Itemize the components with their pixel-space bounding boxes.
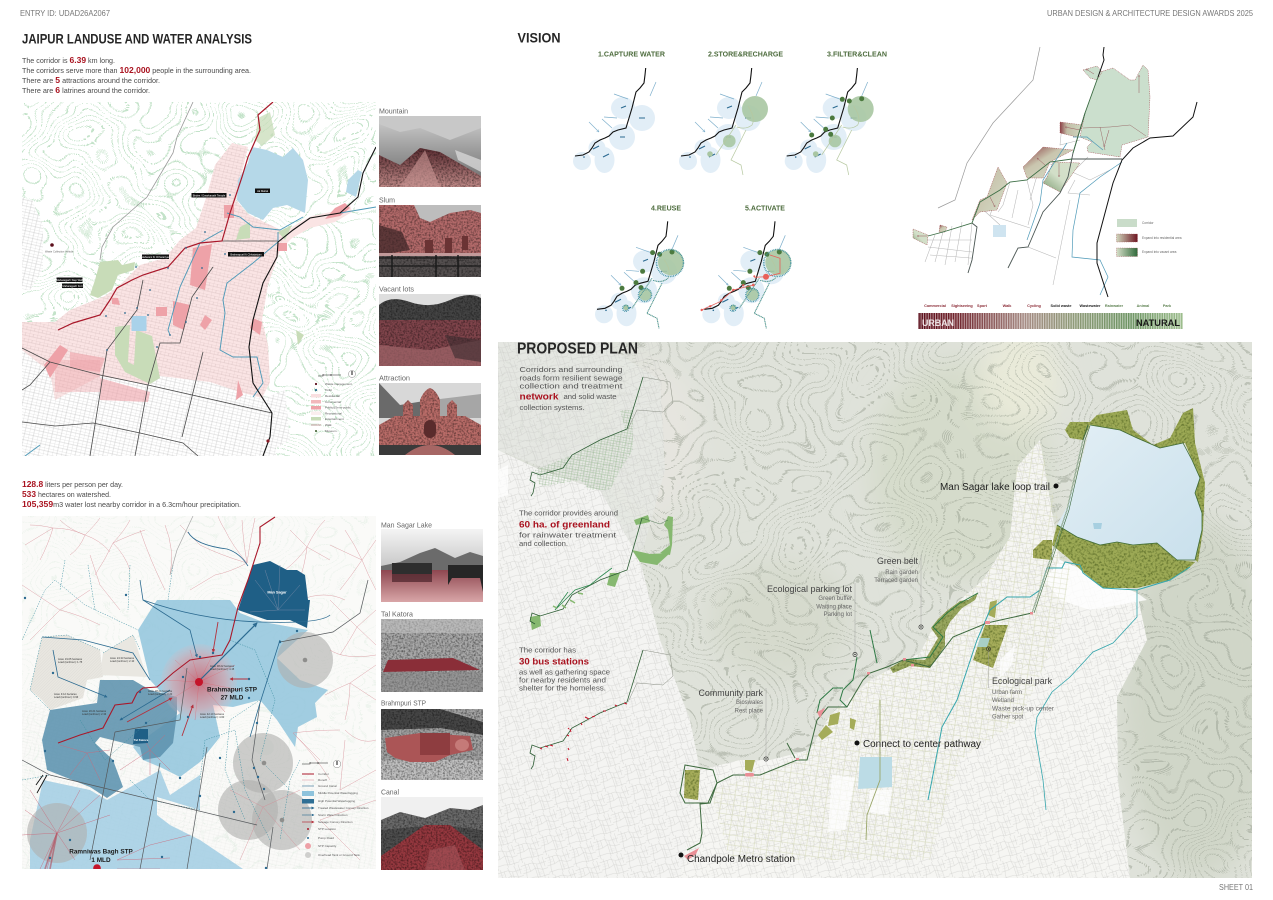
water legend: Overhead Tank or Ground Tank [318, 853, 360, 857]
text block: water figures: 105,359m3 water lost nearby corridor in a 6.3cm/hour precipitation. [22, 499, 241, 509]
text block: sewage network: Corridors and surrounding [520, 367, 623, 374]
olive planted areas [684, 540, 1052, 800]
area labels: Area: 28.24 hectares [148, 689, 173, 693]
text block: greenland: 60 ha. of greenland [519, 518, 610, 530]
photo: vacant lots [379, 284, 481, 366]
recreation green areas [90, 112, 304, 384]
heading: Proposed plan: PROPOSED PLAN [517, 340, 638, 358]
dashed storm boundaries [22, 560, 300, 840]
urban to natural spectrum bar [918, 313, 1183, 329]
water legend: STP Location [318, 827, 336, 831]
step heading 4: 4.REUSE [651, 204, 681, 212]
map tags: Birdee / Dwarkanath Temple [193, 193, 226, 197]
red corridor [58, 102, 273, 330]
landuse legend: Recreational [325, 412, 342, 416]
water legend: Pump Road [318, 836, 334, 840]
inset map: bus stations [530, 650, 673, 769]
text block: greenland [519, 510, 618, 548]
photo: attraction [379, 374, 481, 455]
landuse legend: Public&Semi-public [325, 406, 351, 410]
waterlogging zone: middle watershed [133, 600, 328, 777]
landuse legend: Waste management [325, 382, 352, 386]
callout: community park: Bioswales [736, 700, 763, 706]
inset map: greenland [530, 515, 673, 630]
entry id header: ENTRY ID: UDAD26A2067 [20, 9, 111, 18]
thin grey highway [100, 102, 193, 260]
callout: ecological park [986, 647, 1054, 720]
text block: bus stations: 30 bus stations [519, 656, 589, 666]
callout: green belt [874, 555, 923, 629]
legend: corridor expansion: Expand into residential area [1142, 236, 1182, 240]
callout: Man Sagar lake loop trail: Man Sagar lake loop trail [940, 482, 1050, 493]
photo: canal: Canal [381, 788, 399, 796]
area labels: Load (ton/hour): 1.75 [58, 660, 83, 664]
STP capacity halo [161, 644, 237, 720]
text block: sewage network: roads form resilient sewage [520, 375, 623, 382]
label: Ramniwas Bagh STP: 1 MLD [91, 857, 111, 864]
area labels: Load (ton/hour): 3.20 [148, 692, 173, 696]
text block: corridor facts: The corridor is 6.39 km long. [22, 55, 115, 65]
photo: mountain [379, 106, 481, 187]
red corridor [58, 517, 275, 743]
mountain white highlights [1045, 560, 1147, 610]
photo: attraction: Attraction [379, 374, 410, 383]
city street texture [498, 342, 700, 878]
text block: water figures: 128.8 liters per person per day. [22, 479, 123, 489]
diagram: activate [700, 221, 791, 328]
waterlogging zone: lower watershed [30, 770, 243, 869]
text block: greenland: for rainwater treatment [519, 532, 616, 540]
area labels: Load (ton/hour): 0.96 [54, 695, 79, 699]
pond near center pathway [858, 757, 892, 789]
photo: Tal Katora [381, 610, 483, 692]
dense runoff fans [22, 650, 240, 869]
toilet and museum markers [50, 194, 270, 443]
landuse legend: Walk [325, 423, 332, 427]
text block: greenland: The corridor provides around [519, 510, 618, 518]
pink gathering spots [684, 612, 1033, 860]
landuse legend [311, 370, 356, 433]
spectrum labels: Wastewater [1080, 304, 1101, 308]
callout: green belt: Terraced garden [874, 578, 918, 584]
area labels: Load (ton/hour): 4.60 [200, 715, 225, 719]
text block: bus stations: The corridor has [519, 648, 577, 654]
text block: water figures: 533 hectares on watershed. [22, 489, 111, 499]
inset map: sewage network [530, 377, 673, 496]
text block: bus stations [519, 648, 610, 692]
street grid: south and west districts [22, 197, 290, 456]
diagram: store and recharge [679, 68, 768, 175]
label: Ramniwas Bagh STP: Ramniwas Bagh STP [69, 848, 134, 856]
photo: Man Sagar Lake: Man Sagar Lake [381, 520, 432, 530]
black ring road [249, 147, 376, 456]
spectrum labels: Rainwater [1105, 304, 1124, 308]
callout: community park: Community park [698, 688, 763, 698]
text block: bus stations: as well as gathering space [519, 670, 610, 676]
diagram: filter and clean [785, 68, 874, 175]
callout: community park [698, 688, 768, 761]
map tags [56, 188, 270, 288]
central urban area [680, 440, 1147, 878]
spectrum labels: Sightseeing [951, 304, 973, 308]
text block: greenland: and collection. [519, 541, 568, 548]
urban to natural spectrum bar: NATURAL [1136, 318, 1180, 329]
urban residential landuse [22, 143, 352, 400]
water legend: High Potential Waterlogging [318, 799, 355, 803]
expansion zones residential [972, 122, 1083, 220]
expansion arrows [917, 69, 1139, 236]
runoff lines [22, 516, 376, 860]
callout: ecological park: Gather spot [992, 714, 1024, 720]
legend: corridor expansion: Expand into vacant area [1142, 250, 1177, 254]
water legend: STP Capacity [318, 844, 337, 848]
map tags: Maharani Ki Chhatariyan [141, 255, 170, 259]
north-west city tone [498, 342, 665, 560]
panel: water analysis map [22, 516, 376, 872]
black ring road [1097, 47, 1197, 297]
diagram: corridor expansion map [913, 47, 1197, 297]
green branches [817, 593, 978, 713]
photo: canal [381, 788, 483, 870]
spectrum labels: Cycling [1027, 304, 1042, 308]
spectrum labels: Commercial [924, 304, 946, 308]
text block: sewage network: collection systems. [520, 405, 585, 412]
storm water lines [42, 532, 330, 737]
small lake island [1093, 523, 1102, 529]
lake shoreline trail [1057, 425, 1202, 560]
south street texture [22, 700, 376, 869]
callout: green belt: Green belt [877, 556, 918, 566]
legend: corridor expansion: Corridor [1142, 221, 1154, 225]
text block: bus stations: shelter for the homeless. [519, 686, 606, 692]
hill tone variation [600, 330, 1273, 880]
west green road [866, 700, 880, 840]
panel: proposed plan [498, 330, 1273, 880]
area labels: Area: 19.05 hectares [58, 657, 83, 661]
olive street texture [710, 440, 1070, 860]
callout: ecological parking lot: Parking lot [824, 612, 852, 618]
area labels: Area: 42.10 hectares [200, 712, 225, 716]
expansion zones vacant [913, 162, 1080, 245]
hillside contours [498, 342, 1252, 878]
text block: corridor facts [22, 55, 251, 95]
wetland pond in ecological park [977, 638, 990, 647]
label: Brahmapuri STP: Brahmapuri STP [207, 686, 258, 694]
overhead tank circles [27, 632, 333, 863]
water legend: Storm Water Direction [318, 813, 348, 817]
area labels: Area: 20.21 hectares [82, 709, 107, 713]
label: Brahmapuri STP: 27 MLD [221, 694, 244, 702]
tank symbols [262, 658, 307, 822]
hills base [498, 342, 1252, 878]
callout: ecological park: Ecological park [992, 676, 1052, 686]
landuse legend: Museum [325, 429, 337, 433]
STP location: Ramniwas Bagh [93, 864, 101, 872]
area labels: Area: 24.33 hectares [110, 656, 135, 660]
green belt vegetation [890, 593, 978, 673]
text block: sewage network: network [520, 390, 559, 402]
Man Sagar high waterlogging zone [238, 561, 310, 628]
grey highway north [170, 516, 193, 575]
map tags: Maharajgarh Fort [63, 284, 83, 288]
road network [22, 241, 278, 456]
heading: Jaipur landuse and water analysis: JAIPUR LANDUSE AND WATER ANALYSIS [22, 30, 252, 46]
hatch over dark watershed [92, 681, 100, 704]
Man Sagar fan lines [250, 565, 305, 612]
canals [25, 207, 376, 456]
central street texture [680, 440, 1147, 878]
corridor green line [928, 77, 1098, 236]
panel: landuse map [22, 102, 376, 456]
spectrum labels: Sport [977, 304, 988, 308]
teal canals [1027, 137, 1122, 295]
text block: bus stations: for nearby residents and [519, 678, 606, 684]
photo: slum [379, 195, 481, 277]
callout: connect to center pathway: Connect to center pathway [863, 739, 981, 750]
callout: ecological park: Waste pick-up center [992, 706, 1054, 712]
lake north and east olive band [1065, 408, 1205, 562]
photo: slum: Slum [379, 195, 395, 204]
city white blocks [498, 465, 1015, 832]
diagram: capture water [573, 68, 656, 173]
label: Ramniwas Bagh STP [69, 848, 134, 864]
water legend: Sewage Convey Direction [318, 820, 353, 824]
text block: corridor facts: There are 6 latrines around the corridor. [22, 85, 150, 95]
callout: ecological park: Urban farm [992, 690, 1022, 696]
text block: water figures [22, 479, 241, 509]
dark roads [968, 113, 1122, 273]
area labels: Load (ton/hour): 2.10 [110, 659, 135, 663]
spectrum labels: Walk [1003, 304, 1012, 308]
photo: Brahmpuri STP [381, 698, 483, 780]
callout: community park: Rest place [735, 708, 764, 714]
lake south olive band [1052, 525, 1195, 588]
water legend: Ground Canal [318, 784, 337, 788]
west city area [498, 450, 700, 878]
callout: ecological park: Wetland [992, 698, 1014, 704]
spectrum labels: Park [1163, 304, 1172, 308]
diagram: reuse [595, 221, 684, 328]
pond near park [132, 316, 146, 331]
callout: green belt: Rain garden [885, 570, 918, 576]
legend: corridor expansion [1116, 219, 1182, 256]
award title header: URBAN DESIGN & ARCHITECTURE DESIGN AWARDS 2025 [1047, 9, 1254, 18]
waterlogging zone: left dark watershed [42, 680, 177, 798]
label: Brahmapuri STP [207, 686, 258, 702]
waste management label: Waste Collection Vehicle [45, 250, 74, 254]
callout: ecological parking lot: Waiting place [816, 604, 853, 610]
teal canals [928, 562, 1190, 810]
callout: ecological parking lot: Green buffer [818, 596, 852, 602]
area labels: Load (ton/hour): 4.15 [210, 667, 235, 671]
grey trunk roads [22, 580, 368, 869]
photo: Man Sagar Lake [381, 520, 483, 602]
corridor main green zone [1080, 65, 1150, 157]
STP location: Brahmapuri [195, 678, 203, 686]
water legend [302, 760, 369, 858]
water legend: Middle Potential Waterlogging [318, 791, 358, 795]
spectrum labels [924, 304, 1172, 308]
pond [993, 225, 1006, 237]
landuse legend: Residential [325, 394, 340, 398]
photo: Brahmpuri STP: Brahmpuri STP [381, 698, 426, 708]
area labels: Area: 9.12 hectares [54, 692, 77, 696]
map tags: Jal Mahal [257, 189, 268, 193]
corridor west route [680, 425, 1090, 850]
sewage convey arrows [127, 622, 248, 736]
map tags: Brahmapuri Ki Chhatariyan [230, 252, 262, 256]
text block: sewage network: and solid waste [564, 394, 617, 401]
Tal Katora high waterlogging zone [133, 729, 148, 744]
label: Man Sagar: Man Sagar [267, 590, 287, 594]
landuse legend: Commercial [325, 400, 341, 404]
treated wastewater arrow [200, 623, 257, 680]
water legend: Runoff [318, 778, 327, 782]
inner zone divider [1083, 125, 1146, 150]
public and commercial landuse blocks [44, 203, 350, 402]
water legend: Corridor [318, 772, 329, 776]
callout: ecological parking lot: Ecological parking lot [767, 584, 852, 594]
text block: corridor facts: There are 5 attractions around the corridor. [22, 75, 160, 85]
photo: mountain: Mountain [379, 106, 408, 115]
thin street network [925, 125, 1110, 285]
heading: Vision: VISION [518, 30, 560, 46]
thin grey highway [938, 47, 1040, 208]
step heading 3: 3.FILTER&CLEAN [827, 50, 887, 58]
photo: vacant lots: Vacant lots [379, 284, 414, 294]
waterlogging zone: upper gray hatch [30, 635, 147, 710]
Man Sagar lake [1057, 425, 1202, 560]
landuse legend: Entertainment [325, 417, 344, 421]
area labels [54, 656, 235, 719]
map tags: Maharajgarh Step Well [56, 278, 83, 282]
step heading 1: 1.CAPTURE WATER [598, 50, 666, 58]
photo: Tal Katora: Tal Katora [381, 610, 413, 618]
area labels: Load (ton/hour): 2.33 [82, 712, 107, 716]
water legend: Treated Wastewater Convey Direction [318, 806, 369, 810]
urban to natural spectrum bar: URBAN [922, 318, 954, 329]
black ticks [36, 775, 47, 793]
spectrum labels: Animal [1137, 304, 1149, 308]
sheet number: SHEET 01 [1219, 883, 1253, 892]
landuse legend: Toilet [325, 388, 332, 392]
label: Tal Katora: Tal Katora [134, 738, 149, 742]
secondary lake patch [346, 170, 362, 197]
pump markers [24, 594, 298, 869]
spectrum labels: Solid waste [1051, 304, 1071, 308]
step heading 2: 2.STORE&RECHARGE [708, 50, 783, 58]
text block: sewage network [520, 367, 623, 412]
Man Sagar lake [237, 147, 308, 220]
text block: sewage network: collection and treatment [520, 383, 623, 390]
text block: corridor facts: The corridors serve more than 102,000 people in the surrounding area. [22, 65, 251, 75]
callout: Chandpole Metro station: Chandpole Metro station [687, 854, 795, 865]
area labels: Area: 38.22 hectares [210, 664, 235, 668]
callout: ecological parking lot [767, 583, 857, 657]
step heading 5: 5.ACTIVATE [745, 204, 785, 212]
